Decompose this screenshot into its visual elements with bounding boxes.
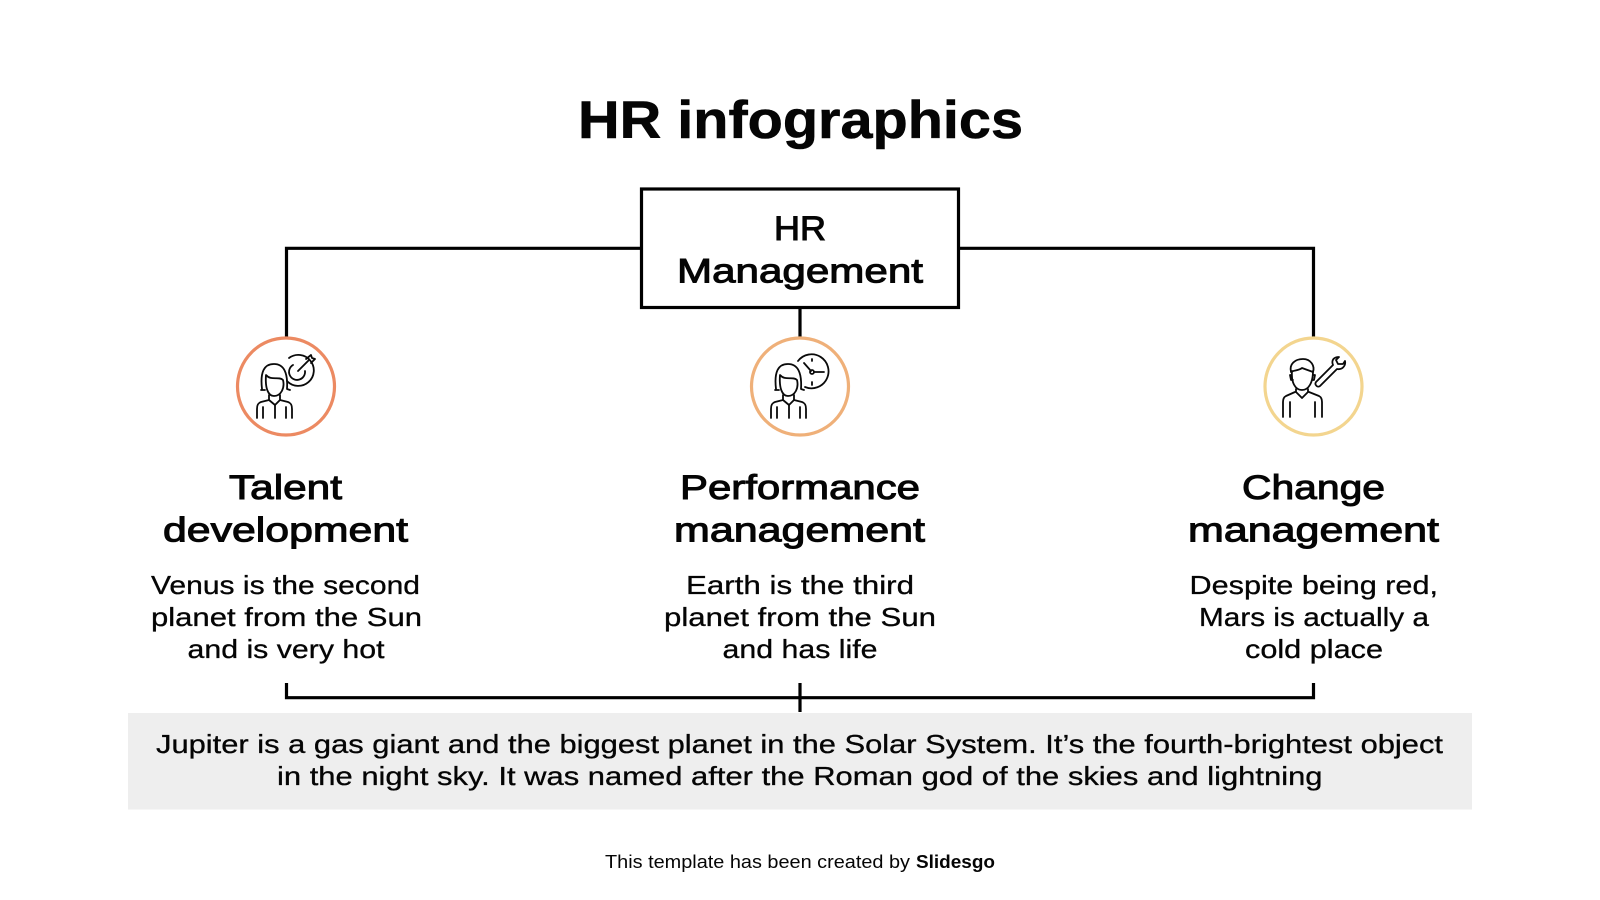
text: Earth description xyxy=(664,570,936,664)
text: Venus description xyxy=(151,570,422,664)
root box: HR Management: Management xyxy=(677,252,924,290)
column: Performance management xyxy=(664,469,936,664)
text: Venus description: planet from the Sun xyxy=(151,602,422,632)
text: Mars description: Mars is actually a xyxy=(1199,602,1430,632)
callout: Jupiter summary: Jupiter is a gas giant and the biggest planet in the Solar System. It’s the fourth-brightest object xyxy=(156,729,1444,759)
heading: Change management: management xyxy=(1188,512,1440,550)
text: Earth description: planet from the Sun xyxy=(664,602,936,632)
text: Mars description xyxy=(1190,570,1438,664)
title: HR infographics xyxy=(578,91,1023,150)
icon: change management xyxy=(1265,338,1362,435)
column: Change management xyxy=(1188,469,1440,664)
root box: HR Management xyxy=(642,189,958,308)
footer credit: This template has been created by xyxy=(605,852,910,872)
connector: top branches xyxy=(286,248,1314,337)
callout: Jupiter summary xyxy=(128,713,1472,810)
column: Talent development xyxy=(151,469,422,664)
text: Mars description: cold place xyxy=(1245,634,1383,664)
heading: Performance management: management xyxy=(674,512,926,550)
heading: Talent development xyxy=(163,469,409,550)
heading: Talent development: development xyxy=(163,512,409,550)
heading: Talent development: Talent xyxy=(229,469,343,507)
text: Venus description: and is very hot xyxy=(188,634,385,664)
heading: Change management xyxy=(1188,469,1440,550)
footer credit: Slidesgo xyxy=(916,852,995,872)
heading: Performance management xyxy=(674,469,926,550)
text: Venus description: Venus is the second xyxy=(151,570,420,600)
root box: HR Management: HR xyxy=(774,210,826,248)
icon: talent development xyxy=(238,338,334,435)
heading: Performance management: Performance xyxy=(680,469,920,507)
callout: Jupiter summary: in the night sky. It was named after the Roman god of the skies and lightning xyxy=(277,761,1322,791)
text: Mars description: Despite being red, xyxy=(1190,570,1438,600)
icon: performance management xyxy=(752,338,848,435)
connector: bottom bracket xyxy=(286,683,1314,712)
heading: Change management: Change xyxy=(1242,469,1385,507)
text: Earth description: and has life xyxy=(722,634,878,664)
text: Earth description: Earth is the third xyxy=(686,570,914,600)
